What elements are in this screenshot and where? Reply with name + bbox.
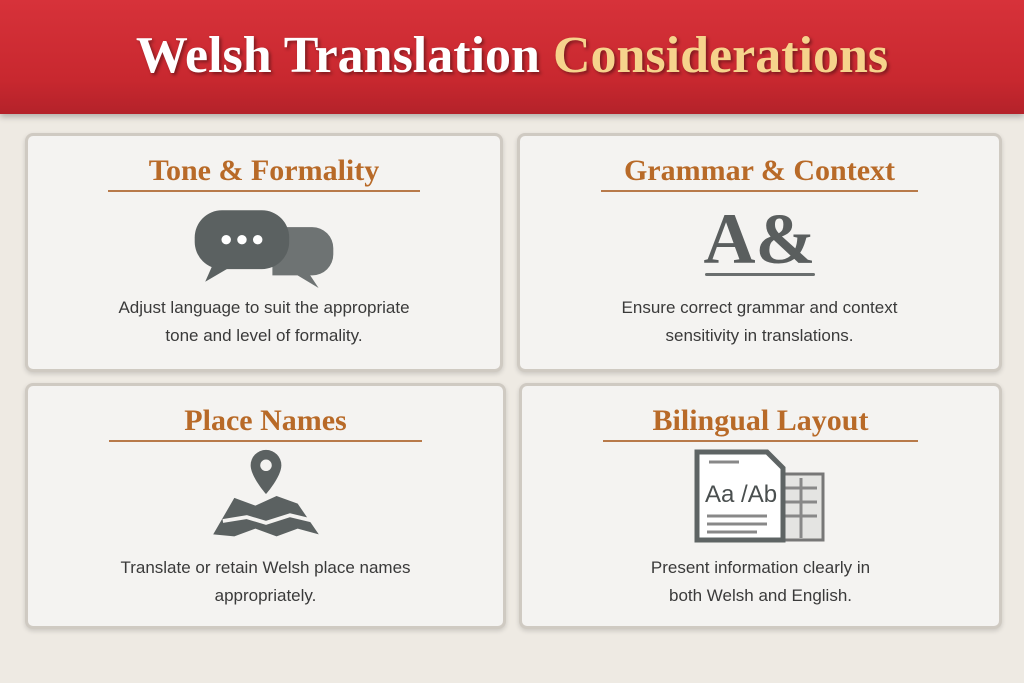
- panel: place names: [25, 383, 506, 629]
- heading: Bilingual Layout: [653, 404, 868, 437]
- icon: document: [694, 450, 824, 542]
- text: both Welsh and English.: [669, 586, 852, 605]
- text: sensitivity in translations.: [665, 326, 854, 345]
- text: Ensure correct grammar and context: [622, 298, 897, 317]
- text: [118, 298, 410, 345]
- text: [622, 298, 898, 345]
- text: Present information clearly in: [651, 558, 870, 577]
- text: Adjust language to suit the appropriate: [118, 298, 410, 317]
- text: tone and level of formality.: [165, 326, 363, 345]
- icon: speech bubbles: [194, 210, 334, 288]
- text: [651, 558, 870, 605]
- icon: map pin: [213, 450, 319, 536]
- icon: A&: A&: [704, 199, 815, 279]
- text: appropriately.: [215, 586, 316, 605]
- heading: Tone & Formality: [149, 154, 379, 187]
- text: Translate or retain Welsh place names: [120, 558, 411, 577]
- header band: [0, 0, 1024, 114]
- title: Welsh Translation Considerations: [136, 27, 888, 84]
- icon: document: Aa /Ab: [704, 481, 777, 508]
- text: [120, 558, 411, 605]
- heading: Place Names: [184, 404, 347, 437]
- panel: tone & formality: [25, 133, 503, 372]
- panel: grammar & context: [517, 133, 1002, 372]
- heading: Grammar & Context: [624, 154, 895, 187]
- panel: bilingual layout: [519, 383, 1002, 629]
